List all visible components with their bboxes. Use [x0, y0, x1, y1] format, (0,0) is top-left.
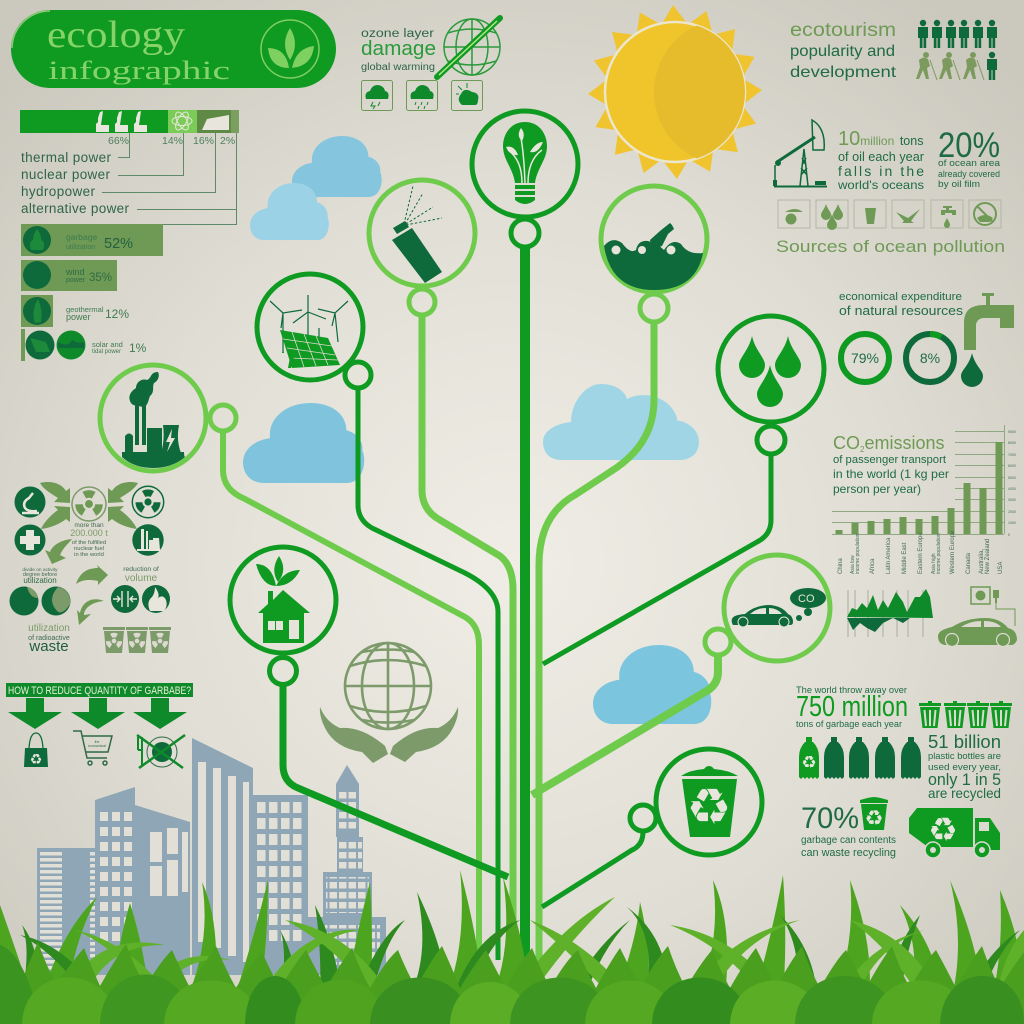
- branch: wave: [539, 321, 654, 1000]
- power share bar: 66%: [108, 135, 129, 147]
- natural resources block: economical expenditure: [839, 291, 962, 303]
- weather icons: [362, 80, 482, 110]
- text: utilization before: degree before: [23, 572, 57, 578]
- icon: recycling truck: ♻: [928, 810, 958, 849]
- nuclear waste flow: [10, 482, 171, 655]
- text: 200.000 t: nuclear fuel: [74, 546, 104, 552]
- country labels: USA: [998, 562, 1004, 574]
- oil spill block: already covered: [938, 169, 1000, 179]
- icon: factory: [132, 524, 164, 556]
- ozone layer block: ozone layer: [361, 28, 434, 40]
- ecotourism block: popularity and: [790, 43, 895, 60]
- natural resources block: of natural resources: [839, 303, 964, 318]
- garbage statistics: used every year,: [928, 762, 1001, 773]
- ecotourism block: development: [790, 64, 897, 81]
- clouds: [243, 136, 711, 724]
- icon circle: ocean waste: [601, 186, 707, 322]
- text: 200.000 t: in the world: [74, 552, 104, 558]
- country labels: Canada: [966, 552, 972, 574]
- dark spikes and droops: [20, 892, 1020, 1005]
- donut 8%: 8%: [920, 350, 940, 366]
- bottles row: [799, 737, 921, 779]
- CO2 emissions chart: emissions: [864, 433, 944, 453]
- garbage statistics: 750 million: [796, 691, 908, 723]
- text: utilization of radioactive waste: waste: [28, 638, 69, 655]
- icon: two discs: [10, 586, 70, 616]
- icon: shopping cart: economical: [88, 744, 106, 748]
- bar: garbage 52%: utilization: [66, 244, 95, 251]
- grass mass: [0, 942, 1024, 1024]
- icon: dam: [202, 115, 229, 130]
- bar: garbage 52%: 52%: [104, 236, 133, 252]
- icon circle: recycle bin: [630, 749, 762, 855]
- icon: microscope: [14, 486, 46, 518]
- icon circle: spray can: [369, 180, 475, 315]
- icon circle: water drops: [718, 316, 824, 454]
- power legend: [21, 133, 236, 224]
- icon: atom: [172, 110, 192, 132]
- oil spill block: world's oceans: [837, 178, 924, 192]
- people icons: [916, 20, 997, 80]
- text: utilization of radioactive waste: of radioactive: [28, 635, 70, 642]
- icon circle: recycle bin: ♻: [687, 778, 731, 836]
- CO2 emissions chart: [832, 425, 1016, 574]
- bar: geothermal 12%: [21, 295, 129, 327]
- country labels: Eastern Europe: [918, 532, 924, 574]
- country labels: Asia low: [850, 555, 856, 574]
- CO2 emissions chart: in the world (1 kg per: [833, 467, 949, 481]
- bar: solar and tidal 1%: tidal power: [92, 349, 121, 355]
- bar: garbage 52%: garbage: [66, 232, 97, 242]
- bar: geothermal 12%: power: [66, 312, 91, 322]
- icon: recycling bag: [24, 733, 48, 768]
- country labels: Africa: [870, 558, 876, 574]
- title text: ecology: ecology: [47, 14, 185, 56]
- ocean pollution sources: [776, 200, 1005, 256]
- country labels: New Zealand: [985, 539, 991, 574]
- garbage statistics: 70%: [801, 802, 859, 835]
- icon: thermal plants: [96, 111, 147, 132]
- axis values: 1000: [1008, 521, 1016, 525]
- text: 200.000 t: 200.000 t: [70, 528, 108, 538]
- icon: globe in hands: [320, 643, 458, 763]
- garbage statistics: can waste recycling: [801, 847, 896, 859]
- axis values: 6000: [1008, 464, 1016, 468]
- garbage statistics: plastic bottles are: [928, 751, 1001, 762]
- donut 8%: [906, 334, 954, 382]
- power legend: hydropower: [21, 184, 96, 199]
- branch: car: [532, 655, 718, 795]
- branch: factory: [223, 431, 479, 960]
- icon: compress: [111, 585, 139, 613]
- garbage statistics: tons of garbage each year: [796, 719, 902, 729]
- icon: recycling bag: ♻: [30, 752, 42, 768]
- icon: faucet: [961, 293, 1014, 387]
- garbage statistics: The world throw away over: [796, 685, 907, 696]
- icon circle: power plant: [100, 365, 236, 471]
- icon: crossed plate: [137, 735, 185, 768]
- banner: [6, 683, 193, 697]
- branch: spray: [422, 315, 513, 980]
- oil spill block: by oil film: [938, 179, 980, 190]
- natural resources block: [839, 291, 1014, 387]
- axis values: [1008, 430, 1016, 537]
- country labels: Australia,: [979, 549, 985, 574]
- icon: medical cross: [14, 524, 46, 556]
- icon: radiation outline: [72, 487, 106, 521]
- electric car: [938, 587, 1017, 646]
- icon: leaf badge: [261, 20, 319, 78]
- garbage statistics: only 1 in 5: [928, 770, 1001, 789]
- oil spill block: falls in the: [838, 163, 924, 179]
- icon: shopping cart: [73, 731, 112, 765]
- lighter sweeping blades: [60, 897, 1024, 1005]
- branch: house: [283, 685, 508, 877]
- power share bar: 2%: [220, 135, 235, 147]
- oil spill block: of ocean area: [938, 158, 1001, 169]
- icon circle: eco house: [230, 547, 336, 684]
- CO2 emissions chart: person per year): [833, 482, 921, 496]
- pollution icons: [785, 203, 996, 230]
- grass: [0, 870, 1024, 1024]
- title text: infographic: infographic: [48, 56, 230, 85]
- grass mounds: [0, 945, 1024, 1024]
- bottles row: ♻: [801, 753, 817, 773]
- text: 200.000 t: more than: [74, 522, 104, 529]
- text: reduction of volume: [123, 566, 159, 584]
- donut 79%: [841, 334, 889, 382]
- cloud 3: [243, 403, 364, 483]
- country labels: Middle East: [902, 542, 908, 574]
- tall back blades: [0, 870, 1024, 1005]
- ozone layer block: damage: [361, 38, 436, 60]
- text: reduction of volume: reduction of: [123, 566, 159, 573]
- text: utilization before: divide on activity: [22, 567, 58, 573]
- bar: solar and tidal 1%: [21, 329, 147, 361]
- axis values: 5000: [1008, 476, 1016, 480]
- ocean pollution sources: Sources of ocean pollution: [776, 237, 1005, 256]
- CO2 emissions chart: of passenger transport: [833, 454, 946, 466]
- country labels: Western Europe: [950, 530, 956, 574]
- tree branches: [223, 247, 771, 1010]
- text: 200.000 t: [70, 522, 108, 558]
- oil spill block: [774, 120, 1001, 192]
- icon: fire: [142, 585, 170, 613]
- bar: solar and tidal 1%: 1%: [129, 341, 147, 355]
- icon: recycling truck: [909, 808, 1000, 858]
- axis values: 8000: [1008, 441, 1016, 445]
- donut 79%: 79%: [851, 350, 879, 366]
- bar: geothermal 12%: 12%: [105, 307, 129, 321]
- axis values: 9000: [1008, 430, 1016, 434]
- text: utilization of radioactive waste: utilization: [28, 623, 70, 634]
- country labels: income population: [936, 533, 942, 574]
- curved arrows: [40, 482, 138, 625]
- garbage statistics: are recycled: [928, 785, 1001, 801]
- ecotourism block: [790, 20, 997, 81]
- bar: wind 35%: 35%: [89, 272, 112, 284]
- branch: trash: [542, 832, 643, 907]
- bar: wind 35%: [21, 260, 117, 291]
- power share bar: 16%: [193, 135, 214, 147]
- alternative power bars: [21, 224, 163, 361]
- power legend: nuclear power: [21, 167, 110, 182]
- bar: geothermal 12%: geothermal: [66, 305, 104, 314]
- axis values: 4000: [1008, 487, 1016, 491]
- icon: radioactive bins: [103, 627, 171, 653]
- oil spill block: 10million tons: [838, 128, 923, 150]
- power legend: thermal power: [21, 150, 112, 165]
- sun: [588, 5, 762, 179]
- city skyline: [37, 738, 386, 975]
- power legend: alternative power: [21, 201, 130, 216]
- cloud 5: [593, 645, 711, 724]
- bar: wind 35%: wind: [65, 267, 85, 277]
- CO2 emissions chart: 2: [860, 445, 865, 454]
- bar: wind 35%: power: [66, 277, 86, 284]
- bars: [836, 442, 1002, 534]
- axis values: 2000: [1008, 510, 1016, 514]
- title panel: [11, 10, 336, 88]
- icon: small recycling bin: [860, 797, 888, 830]
- text: utilization of radioactive waste: [28, 623, 70, 655]
- arrows: [8, 698, 187, 729]
- power share bar: 14%: [162, 135, 183, 147]
- power share bar: [20, 110, 239, 147]
- icon: shopping cart: the: [95, 740, 99, 744]
- icon: small recycling bin: ♻: [865, 806, 883, 830]
- country labels: Asia high: [931, 553, 937, 574]
- bins row: [919, 701, 1012, 728]
- garbage statistics: garbage can contents: [801, 835, 896, 846]
- text: utilization before: [22, 567, 58, 585]
- axis values: 7000: [1008, 453, 1016, 457]
- text: reduction of volume: volume: [125, 573, 158, 584]
- bar: solar and tidal 1%: solar and: [92, 340, 123, 349]
- oil spill block: of oil each year: [838, 150, 924, 164]
- area chart: [847, 589, 933, 637]
- icon: globe thermometer: [437, 18, 500, 77]
- text: utilization before: utilization: [23, 576, 57, 585]
- bar: garbage 52%: [21, 224, 163, 256]
- garbage statistics: 51 billion: [928, 731, 1001, 752]
- country labels: China: [838, 558, 844, 574]
- icon circle: wind and solar: [257, 274, 371, 388]
- icon circle: car emissions: CO: [798, 593, 815, 605]
- gridlines: [832, 425, 1004, 534]
- banner: HOW TO REDUCE QUANTITY OF GARBABE?: [8, 685, 191, 697]
- text: 200.000 t: of the fulfilled: [72, 540, 106, 546]
- oil spill block: 20%: [938, 126, 1000, 165]
- icon circle: bulb: [472, 111, 578, 247]
- axis values: 0: [1008, 533, 1010, 537]
- axis values: 3000: [1008, 498, 1016, 502]
- country labels: income population: [855, 533, 861, 574]
- icon: radiation dark: [132, 486, 164, 518]
- branch: drops: [543, 454, 771, 664]
- cloud 2: [250, 183, 329, 240]
- cloud 4: [543, 384, 699, 460]
- CO2 emissions chart: CO: [833, 433, 860, 453]
- country labels: [838, 530, 1004, 574]
- ecotourism block: ecotourism: [790, 20, 896, 41]
- cloud 1: [292, 136, 382, 197]
- icon: oil pump: [774, 120, 827, 186]
- ozone layer block: global warming: [361, 62, 435, 73]
- country labels: Latin America: [886, 537, 892, 574]
- garbage statistics: [796, 685, 1012, 859]
- branch: solar: [358, 388, 498, 960]
- garbage reduction panel: [6, 683, 193, 768]
- trunk: [520, 247, 530, 1010]
- ozone layer block: [361, 18, 500, 110]
- icon circle: car emissions: [705, 555, 830, 661]
